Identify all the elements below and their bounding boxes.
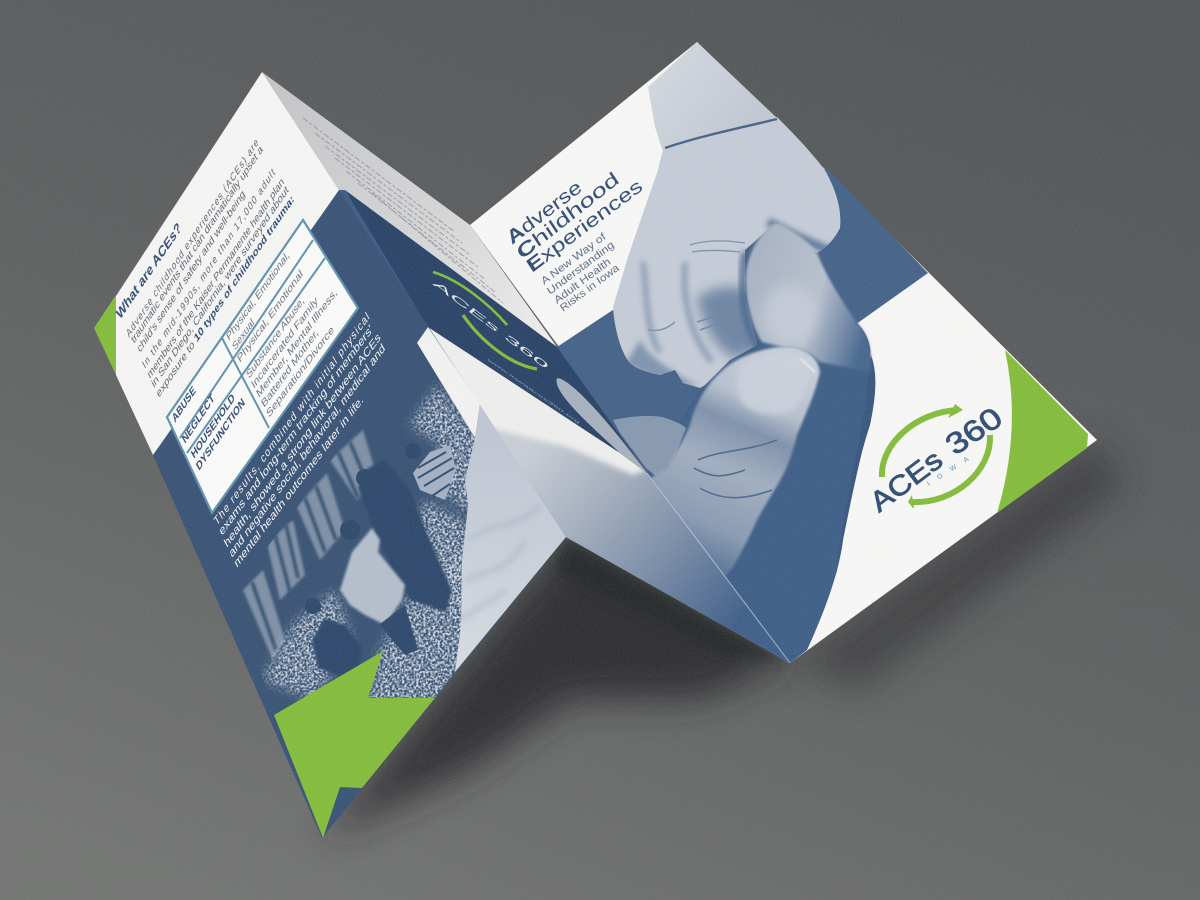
table descriptions: Physical, Emotional: [236, 268, 305, 366]
table descriptions: Sexual: [231, 317, 256, 354]
table descriptions: Physical, Emotional,: [225, 249, 291, 344]
left page blue: [153, 190, 566, 838]
child's fist: [613, 117, 840, 388]
flap silver shape: [557, 378, 647, 473]
table descriptions: Substance Abuse,: [245, 294, 306, 382]
child's arm: [648, 42, 777, 152]
fold crease: [647, 473, 790, 663]
green corner: [997, 350, 1088, 513]
photo: family walking in woods: [242, 343, 475, 701]
table descriptions: Member, Mental Illness,: [255, 286, 339, 401]
table descriptions: [225, 249, 339, 421]
table descriptions: Battered Mother,: [260, 327, 320, 411]
heading: What are ACEs?: What are ACEs?: [114, 219, 183, 323]
panel: right cover: [470, 42, 1097, 663]
flap logo text: ACEs 360: [431, 279, 551, 371]
panel: left inner page: [94, 72, 566, 838]
adult palm: [647, 253, 874, 663]
flap website: www.iowaaces360.org: [485, 357, 581, 425]
table categories: ABUSE: [171, 384, 198, 426]
cover subtitle: Understanding: [546, 240, 617, 297]
white strip by fold: [417, 327, 480, 438]
table categories: [171, 384, 247, 474]
table descriptions: Incarcerated Family: [250, 295, 320, 392]
logo: ACEs 360 Iowa: [864, 402, 1009, 518]
logo sublabel: IOWA: [926, 456, 971, 488]
cover subtitle: A New Way of: [540, 231, 608, 287]
person in striped shirt: [413, 445, 456, 500]
cover subtitle: Adult Health: [553, 256, 613, 306]
logo wordmark: [864, 402, 1009, 518]
child: [312, 618, 362, 680]
forest ground: [262, 590, 352, 700]
adult in light shirt: [340, 528, 405, 625]
results text: health, showed a strong link between ACEs: [223, 330, 383, 551]
cast shadows: [322, 440, 1125, 838]
results text: mental health outcomes later in life.: [232, 393, 366, 571]
cover title: Adverse: [503, 177, 586, 249]
logo arrows: [882, 410, 958, 477]
hand image on left page: [455, 405, 566, 672]
wrist crease: [665, 119, 777, 148]
results text: and negative social, behavioral, medical and: [228, 341, 387, 561]
cover title: [503, 169, 647, 277]
photo: adult hand holding child's fist: [613, 42, 875, 663]
green arrow: [274, 651, 435, 838]
forest trunks: [252, 442, 368, 650]
logo wordmark: ACEs: [864, 444, 948, 518]
table categories: HOUSEHOLD: [190, 391, 237, 462]
lower hand image on middle fold: [428, 327, 790, 663]
cover subtitle: Risks in Iowa: [559, 263, 622, 314]
intro text: traumatic events that can dramatically upset a: [130, 143, 265, 347]
adult thumb: [650, 347, 820, 580]
intro text: child's sense of safety and well-being: [136, 188, 247, 356]
panel: middle fold: [262, 72, 790, 664]
dark flap with logo: [339, 190, 647, 473]
intro text: members of the Kaiser Permanente health plan: [146, 176, 286, 382]
finger shading: [697, 287, 760, 358]
results text: The results, combined with initial physical: [213, 310, 371, 529]
gray back strip with tiny text: [262, 72, 557, 347]
adult in dark coat: [358, 460, 452, 612]
flap logo arcs: [433, 272, 507, 325]
cover blue band: [557, 168, 928, 473]
results text: exams and long-term tracking of members': [218, 323, 375, 539]
cover title: Childhood: [513, 169, 623, 264]
intro text: in San Diego, California, were surveyed about: [150, 184, 291, 391]
small finger below fist: [613, 416, 686, 483]
intro text: Adverse childhood experiences (ACEs) are: [125, 136, 261, 341]
left page white: [116, 72, 339, 455]
table categories: DYSFUNCTION: [195, 396, 247, 474]
flap shaded fold: [339, 190, 428, 330]
adult index finger: [746, 222, 871, 372]
forest light background: [243, 430, 378, 660]
cover title: Experiences: [523, 176, 647, 277]
logo wordmark: 360: [939, 402, 1009, 462]
table: [167, 220, 358, 513]
intro text: [125, 136, 296, 401]
table descriptions: Separation/Divorce: [265, 323, 336, 421]
intro text: exposure to 10 types of childhood trauma:: [155, 193, 296, 401]
cover subtitle: [540, 231, 622, 314]
intro text: In the mid-1990s, more than 17,000 adult: [141, 166, 277, 372]
cover white paper: [470, 42, 1097, 663]
green tab: [94, 295, 116, 375]
table categories: NEGLECT: [181, 391, 217, 447]
